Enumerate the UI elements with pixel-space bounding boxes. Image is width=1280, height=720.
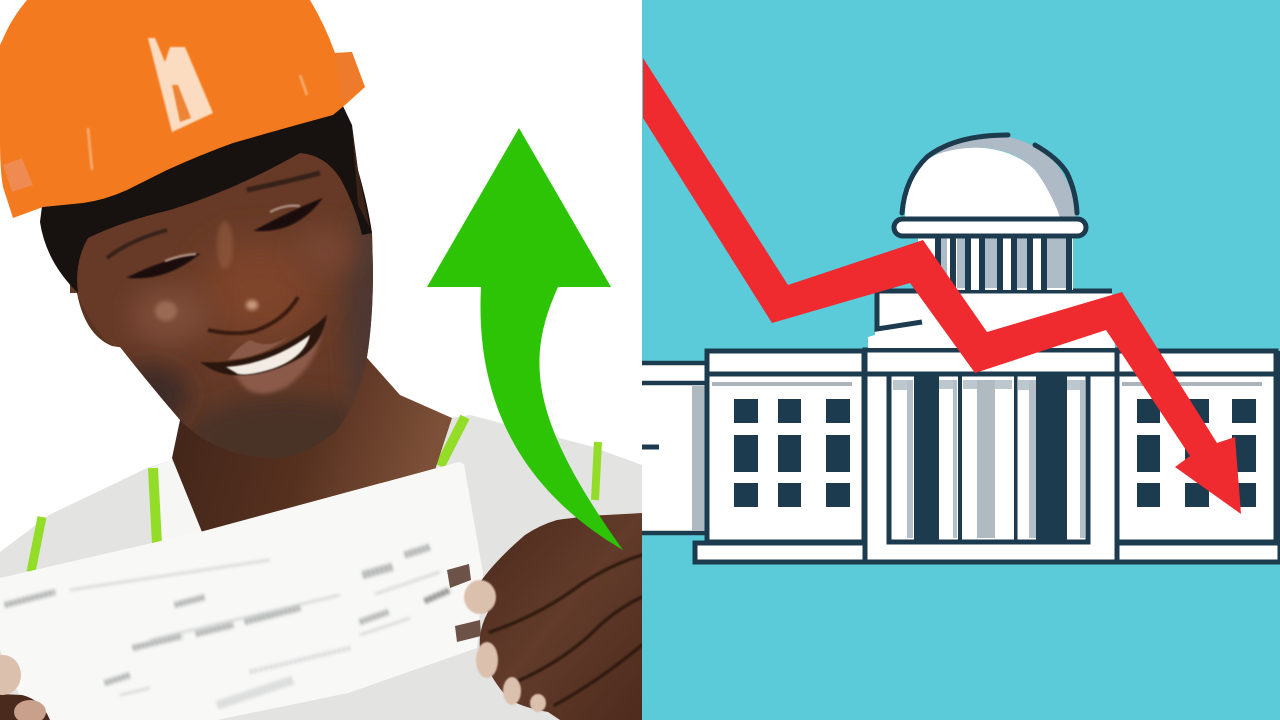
panel: government background (642, 0, 1280, 720)
lower lip (232, 320, 322, 394)
mouth (200, 315, 327, 394)
portico columns (893, 376, 1085, 540)
centre block (865, 350, 1117, 562)
hair (40, 104, 372, 293)
hat strap lugs (3, 158, 33, 192)
worker figure (0, 0, 642, 720)
base plinth (695, 543, 1280, 562)
arrow: green up (427, 128, 623, 550)
finger nails (464, 580, 546, 712)
face warm highlights (200, 240, 320, 340)
ear (77, 290, 125, 348)
face (70, 153, 373, 458)
hat highlight (148, 38, 213, 132)
teeth (226, 335, 310, 374)
left hand (0, 694, 50, 720)
left wing (707, 351, 864, 542)
paycheck corner tabs (447, 564, 481, 642)
dome cornice (894, 219, 1086, 236)
shirt collar (150, 460, 205, 545)
right wing (1117, 351, 1276, 542)
right hand (475, 513, 642, 720)
left wing extension (642, 362, 707, 533)
shirt (0, 415, 642, 720)
nose shadow (208, 297, 298, 333)
arrow: red down trend (643, 58, 1241, 514)
fingers (490, 555, 642, 705)
smile gap (200, 315, 327, 375)
upper lip (228, 336, 290, 360)
government building (642, 135, 1280, 562)
paycheck (0, 462, 483, 720)
neck (172, 350, 452, 532)
right eye (247, 173, 320, 230)
hard hat (0, 0, 365, 218)
portico frame (889, 376, 1088, 542)
right ear edge (352, 128, 370, 228)
building windows (734, 399, 1256, 507)
panel: worker background (0, 0, 642, 720)
face lower shadow (186, 388, 351, 458)
dome (902, 135, 1077, 217)
paycheck writing (5, 547, 450, 705)
shirt safety stripes (31, 417, 598, 572)
colonnade (918, 238, 1073, 290)
upper drum (868, 292, 1115, 348)
left eye (107, 230, 197, 277)
